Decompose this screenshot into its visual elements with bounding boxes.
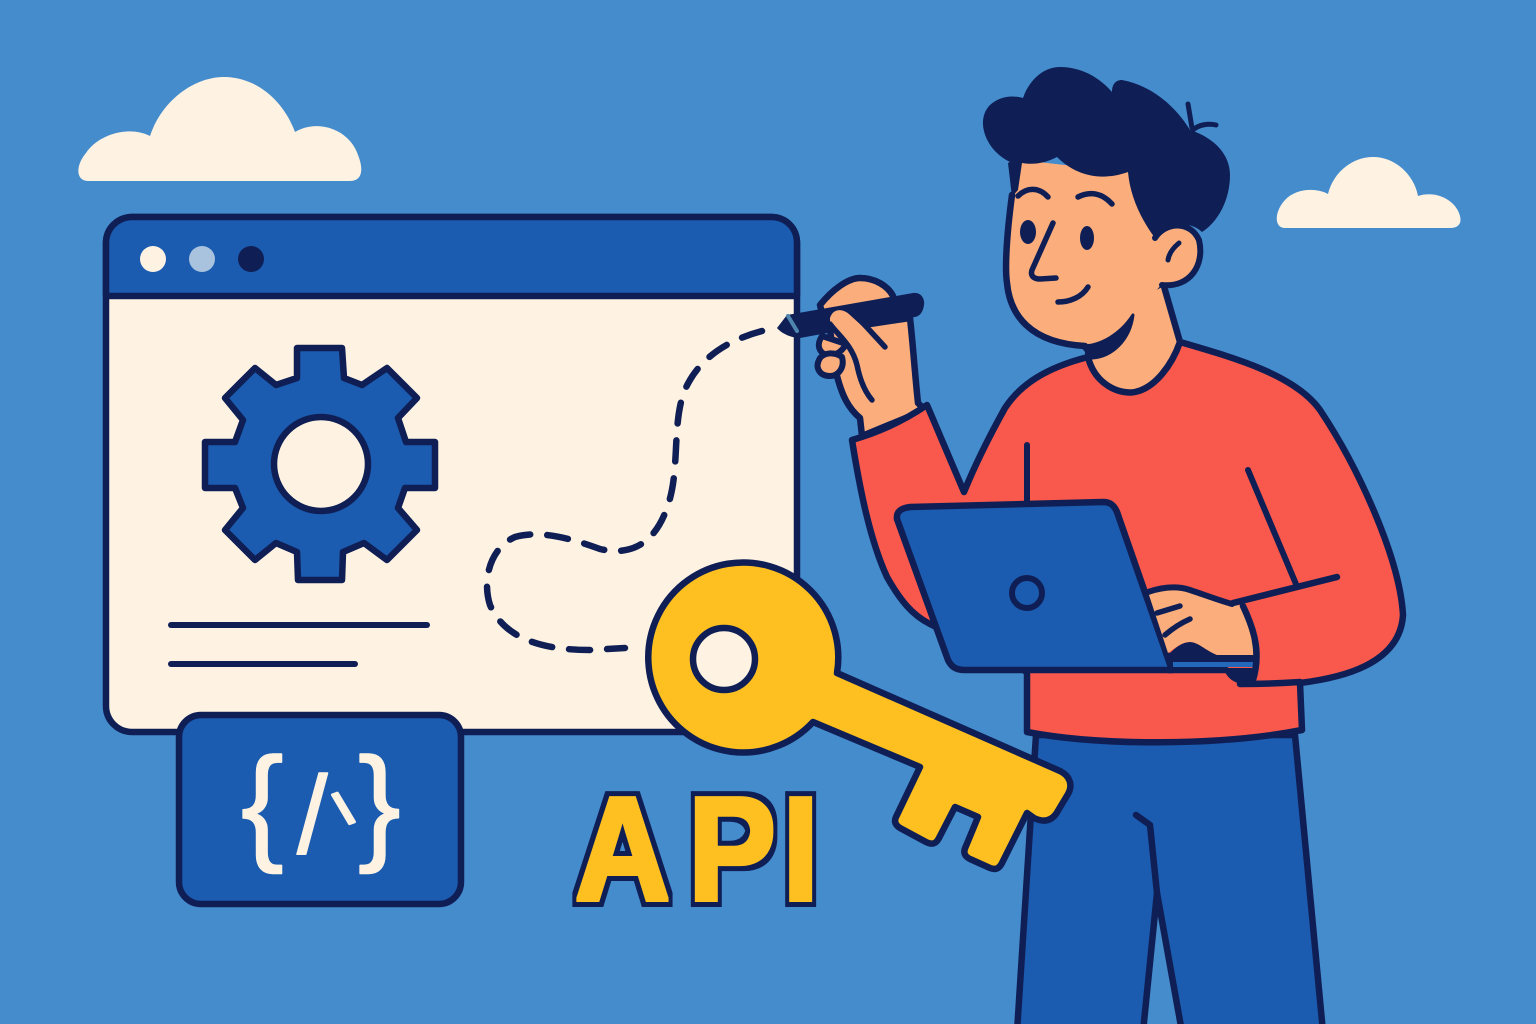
key hole xyxy=(693,628,755,690)
hair tuft xyxy=(1188,104,1216,130)
panel: code badge xyxy=(179,715,461,904)
gear hole xyxy=(274,417,368,511)
icon: cloud right xyxy=(1277,157,1461,228)
window dot white xyxy=(140,246,166,272)
sleeve cuff xyxy=(1233,577,1337,680)
sweater fold left xyxy=(1024,445,1030,505)
nose xyxy=(1031,223,1056,279)
window title bar xyxy=(106,217,797,296)
code symbol text: / xyxy=(297,754,328,877)
pen highlight xyxy=(788,316,797,331)
code symbol text: \ xyxy=(330,784,358,834)
laptop base line xyxy=(1168,667,1226,673)
eyebrow right xyxy=(1078,194,1112,204)
mouth xyxy=(1058,287,1088,302)
code symbol text: } xyxy=(358,732,401,875)
sweater xyxy=(852,342,1403,742)
ear xyxy=(1155,226,1200,285)
lower hand outline xyxy=(1148,587,1232,604)
panel: browser window xyxy=(106,217,797,732)
icon: cloud left xyxy=(78,77,361,181)
text line short xyxy=(171,661,355,667)
hair xyxy=(983,67,1230,238)
eye right xyxy=(1080,226,1094,250)
sweater fold right xyxy=(1248,470,1296,584)
ring finger xyxy=(819,336,846,355)
eyebrow left xyxy=(1018,189,1048,197)
code symbol text: { xyxy=(241,732,284,875)
laptop logo xyxy=(1012,578,1042,608)
pen xyxy=(777,293,924,338)
little finger xyxy=(818,353,843,376)
sleeve underside xyxy=(1240,682,1300,684)
jaw outline xyxy=(1006,195,1085,346)
thumb xyxy=(830,310,885,400)
lower fingers xyxy=(1157,606,1190,635)
window dot dark xyxy=(238,246,264,272)
thumb outline xyxy=(830,322,885,400)
inner ear xyxy=(1168,243,1179,260)
window body xyxy=(106,217,797,732)
window dot light xyxy=(189,246,215,272)
chin shadow xyxy=(1082,315,1133,358)
icon: yellow key xyxy=(648,562,1070,869)
neck xyxy=(1088,283,1180,393)
heading: API: API xyxy=(575,766,819,932)
keyboard shadow xyxy=(1168,642,1258,670)
lower hand xyxy=(1148,587,1257,655)
trousers xyxy=(1017,735,1323,1024)
laptop xyxy=(897,502,1172,670)
text line long xyxy=(171,622,427,628)
keyboard strip xyxy=(1173,662,1253,667)
cuff shadow xyxy=(1225,668,1258,684)
eye left xyxy=(1020,220,1036,244)
face xyxy=(1006,160,1172,345)
knuckle xyxy=(820,278,895,325)
hand holding pen, palm xyxy=(830,318,925,436)
arrow: dashed path from pen xyxy=(487,331,762,650)
trouser crease xyxy=(1136,815,1157,893)
icon: gear xyxy=(205,348,435,580)
character: developer xyxy=(777,67,1403,1024)
